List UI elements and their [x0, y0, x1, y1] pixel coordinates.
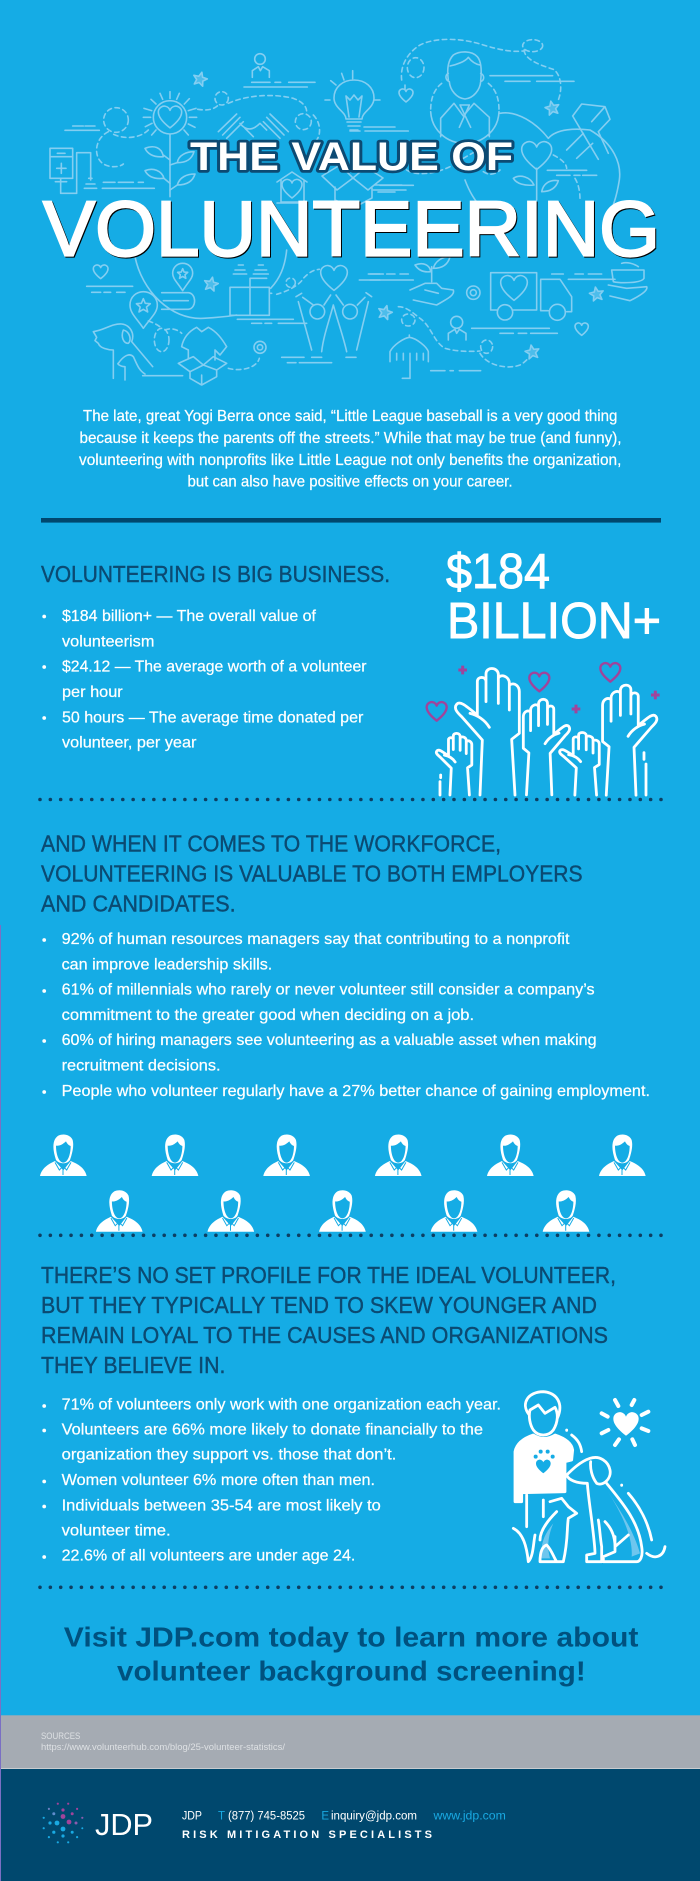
- title line 2: VOLUNTEERING: [43, 184, 660, 272]
- section 3 bullets: Individuals between 35-54 are most likely to: [62, 1497, 381, 1514]
- dotted divider 3: [40, 1586, 663, 1589]
- call to action: Visit JDP.com today to learn more about: [64, 1622, 638, 1653]
- section 2 bullets: [42, 931, 650, 1100]
- section 3 heading: THERE’S NO SET PROFILE FOR THE IDEAL VOLUNTEER,: [41, 1262, 616, 1288]
- section 1 bullets: $184 billion+ — The overall value of: [62, 608, 317, 625]
- section 3 bullets: Women volunteer 6% more often than men.: [62, 1472, 375, 1489]
- section 3 heading: THEY BELIEVE IN.: [41, 1352, 225, 1378]
- section 2 bullets: recruitment decisions.: [62, 1058, 221, 1075]
- line art: upper left icons: [50, 54, 353, 197]
- big number callout: BILLION+: [447, 592, 661, 649]
- big number callout: $184: [446, 545, 550, 599]
- section 2 heading: VOLUNTEERING IS VALUABLE TO BOTH EMPLOYERS: [41, 860, 583, 886]
- section 1 bullets: per hour: [62, 684, 123, 701]
- line art: upper right icons: [350, 39, 620, 220]
- icon: raised hands with hearts: [427, 663, 660, 795]
- section 3 bullets: [42, 1396, 501, 1565]
- section 2 bullets: 61% of millennials who rarely or never volunteer still consider a company’s: [62, 982, 595, 999]
- call to action: volunteer background screening!: [117, 1656, 586, 1687]
- section 3 heading: BUT THEY TYPICALLY TEND TO SKEW YOUNGER AND: [41, 1292, 597, 1318]
- section 2 bullets: 92% of human resources managers say that contributing to a nonprofit: [62, 931, 570, 948]
- section 2 heading: AND WHEN IT COMES TO THE WORKFORCE,: [41, 831, 501, 857]
- title: [43, 135, 660, 272]
- hero line-art illustration: [50, 39, 647, 385]
- sources band: SOURCES: [41, 1731, 80, 1742]
- section 2 heading: [41, 831, 583, 916]
- logo: JDP: JDP: [95, 1807, 153, 1842]
- dotted divider 1: [40, 798, 663, 801]
- icon: volunteer with dog and cat: [513, 1392, 665, 1562]
- dotted divider 2: [40, 1234, 663, 1237]
- contact details: (877) 745-8525: [228, 1810, 305, 1822]
- section 3 bullets: 22.6% of all volunteers are under age 24.: [62, 1548, 355, 1565]
- line art: light bulb: [334, 80, 380, 130]
- section 2 bullets: 60% of hiring managers see volunteering as a valuable asset when making: [62, 1032, 597, 1049]
- intro paragraph: The late, great Yogi Berra once said, “Little League baseball is a very good thing: [83, 408, 617, 425]
- intro paragraph: but can also have positive effects on your career.: [188, 474, 512, 490]
- section 3 heading: [41, 1262, 616, 1378]
- section 1 bullets: volunteerism: [62, 634, 154, 650]
- divider rule: [41, 518, 661, 523]
- section 2 heading: AND CANDIDATES.: [41, 890, 236, 916]
- section 2 bullets: People who volunteer regularly have a 27% better chance of gaining employment.: [62, 1083, 650, 1100]
- call to action: [64, 1622, 638, 1687]
- sources band: [0, 1715, 700, 1769]
- title line 1: THE VALUE OF: [190, 135, 513, 179]
- intro paragraph: [79, 408, 622, 490]
- logo: JDP: [43, 1803, 153, 1843]
- section 3 bullets: organization they support vs. those that don’t.: [62, 1447, 396, 1464]
- contact details: inquiry@jdp.com: [331, 1810, 417, 1822]
- section 3 bullets: Volunteers are 66% more likely to donate financially to the: [62, 1421, 483, 1438]
- section 1 heading: VOLUNTEERING IS BIG BUSINESS.: [41, 561, 390, 587]
- sources band: https://www.volunteerhub.com/blog/25-volunteer-statistics/: [41, 1742, 285, 1753]
- section 1 bullets: 50 hours — The average time donated per: [62, 710, 363, 726]
- section 2 bullets: commitment to the greater good when deciding on a job.: [62, 1007, 474, 1024]
- contact details: www.jdp.com: [432, 1810, 506, 1822]
- big number callout: [446, 545, 661, 649]
- section 3 heading: REMAIN LOYAL TO THE CAUSES AND ORGANIZATIONS: [41, 1322, 608, 1348]
- contact details: E: [321, 1810, 329, 1822]
- intro paragraph: volunteering with nonprofits like Little League not only benefits the organization,: [79, 452, 621, 469]
- icon row: professionals: [40, 1134, 646, 1232]
- contact details: T: [218, 1810, 225, 1822]
- contact details: [182, 1810, 506, 1822]
- left edge line: [0, 925, 1, 1881]
- section 1 bullets: volunteer, per year: [62, 734, 196, 752]
- line art: lower right icons: [370, 257, 647, 378]
- intro paragraph: because it keeps the parents off the streets.” While that may be true (and funny),: [80, 430, 622, 447]
- tagline: RISK MITIGATION SPECIALISTS: [182, 1829, 432, 1841]
- line art: house and open box behind title: [277, 165, 402, 208]
- section 2 bullets: can improve leadership skills.: [62, 956, 272, 973]
- section 3 bullets: volunteer time.: [62, 1523, 171, 1540]
- section 3 bullets: 71% of volunteers only work with one organization each year.: [62, 1396, 501, 1413]
- footer band: [0, 1769, 700, 1881]
- section 1 bullets: [42, 608, 367, 752]
- line art: lower left icons: [87, 250, 380, 385]
- section 1 bullets: $24.12 — The average worth of a volunteer: [62, 658, 366, 676]
- contact details: JDP: [182, 1810, 202, 1822]
